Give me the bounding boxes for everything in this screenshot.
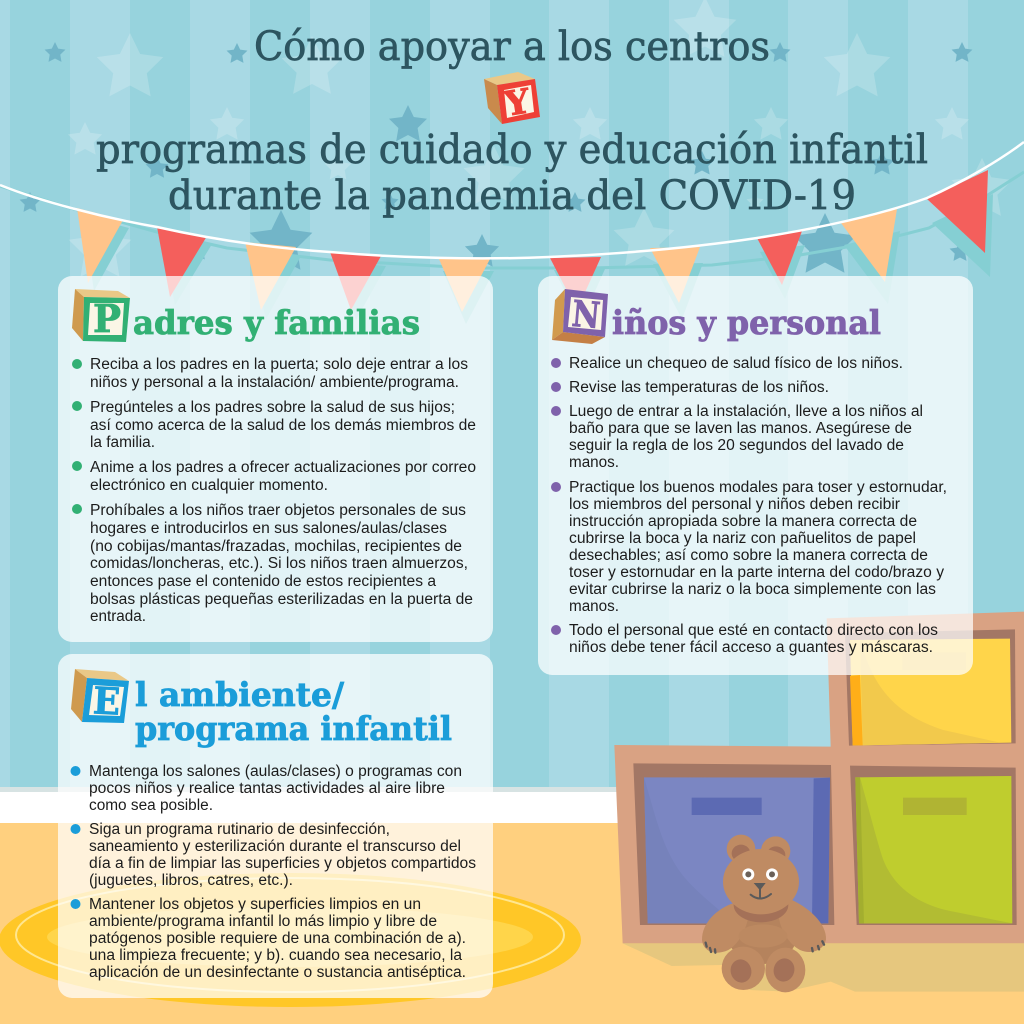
bullet list: environment: pocos niños y realice tantas actividades al aire libre xyxy=(89,780,445,797)
bullet list: children and staff: manos. xyxy=(569,454,619,471)
bullet list: children and staff: baño para que se laven las manos. Asegúrese de xyxy=(569,420,912,437)
blue bin xyxy=(644,777,830,923)
title: durante la pandemia del COVID-19 xyxy=(168,173,856,219)
bullet list: parents: (no cobijas/mantas/frazadas, mochilas, recipientes de xyxy=(90,538,462,555)
icon: E alphabet block: E xyxy=(92,678,121,724)
bullet list: environment: Mantener los objetos y superficies limpios en un xyxy=(89,896,421,913)
panel: Padres y familias xyxy=(58,276,493,642)
bullet list: parents: entonces pase el contenido de estos recipientes a xyxy=(90,573,436,590)
icon: N alphabet block: N xyxy=(570,293,602,337)
bullet list: parents: bolsas plásticas pequeñas esterilizadas en la puerta de xyxy=(90,591,473,608)
bullet list: children and staff: seguir la regla de los 20 segundos del lavado de xyxy=(569,437,904,454)
bullet list: children and staff: Todo el personal que esté en contacto directo con los xyxy=(569,622,938,639)
title: Cómo apoyar a los centros xyxy=(254,24,770,70)
bullet list: parents: niños y personal a la instalación/ ambiente/programa. xyxy=(90,374,459,391)
bullet list: environment: Mantenga los salones (aulas/clases) o programas con xyxy=(89,763,462,780)
icon: E alphabet block xyxy=(71,669,129,724)
bunting flags xyxy=(77,170,988,312)
bullet list: children and staff: Practique los buenos modales para toser y estornudar, xyxy=(569,479,947,496)
bullet list: parents xyxy=(72,356,476,625)
bullet list: parents: así como acerca de la salud de los demás miembros de xyxy=(90,417,476,434)
bullet list: parents: Pregúnteles a los padres sobre la salud de sus hijos; xyxy=(90,399,455,416)
bullet list: environment: saneamiento y esterilización durante el transcurso del xyxy=(89,838,461,855)
background: floor and baseboard xyxy=(0,787,1024,1024)
icon: N alphabet block xyxy=(552,289,608,344)
bullet list: environment: Siga un programa rutinario de desinfección, xyxy=(89,821,390,838)
icon: Y alphabet block: Y xyxy=(501,81,533,125)
bullet list: parents: Anime a los padres a ofrecer actualizaciones por correo xyxy=(90,459,476,476)
icon: Y alphabet block xyxy=(484,72,540,125)
bullet list: parents: comidas/loncheras, etc.). Si los niños traen almuerzos, xyxy=(90,555,468,572)
bullet list: children and staff: Realice un chequeo de salud físico de los niños. xyxy=(569,355,903,372)
bullet list: parents: Prohíbales a los niños traer objetos personales de sus xyxy=(90,502,466,519)
bunting string xyxy=(0,142,1024,258)
furniture: cubby shelf xyxy=(614,612,1024,992)
teddy bear xyxy=(702,835,826,992)
bullet list: environment: (juguetes, libros, catres, etc.). xyxy=(89,872,293,889)
floor shadow of shelf xyxy=(623,943,1024,992)
bullet list: children and staff: manos. xyxy=(569,598,619,615)
heading: Padres y familias: adres y familias xyxy=(133,303,420,342)
heading: Niños y personal: iños y personal xyxy=(612,303,881,342)
bullet list: children and staff: desechables; así como sobre la manera correcta de xyxy=(569,547,928,564)
heading: El ambiente / programa infantil: l ambiente/ xyxy=(135,675,345,714)
bullet list: children and staff: toser y estornudar en la parte interna del codo/brazo y xyxy=(569,564,944,581)
bullet list: children and staff xyxy=(551,355,947,656)
bullet list: environment: como sea posible. xyxy=(89,797,213,814)
bullet list: environment: aplicación de un desinfectante o sustancia antiséptica. xyxy=(89,964,466,981)
bullet list: children and staff: instrucción apropiada sobre la manera correcta de xyxy=(569,513,917,530)
title: programas de cuidado y educación infantil xyxy=(96,127,928,173)
bullet list: parents: la familia. xyxy=(90,434,155,451)
bullet list: children and staff: Revise las temperaturas de los niños. xyxy=(569,379,829,396)
rug xyxy=(0,873,581,1007)
bullet list: environment: ambiente/programa infantil lo más limpio y libre de xyxy=(89,913,437,930)
panel: Niños y personal xyxy=(538,276,973,675)
bullet list: children and staff: los miembros del personal y niños deben recibir xyxy=(569,496,900,513)
bullet list: parents: hogares e introducirlos en sus salones/aulas/clases xyxy=(90,520,447,537)
bullet list: parents: electrónico en cualquier momento. xyxy=(90,477,328,494)
bullet list: children and staff: Luego de entrar a la instalación, lleve a los niños al xyxy=(569,403,923,420)
bunting shadow xyxy=(0,172,1024,324)
bullet list: parents: Reciba a los padres en la puerta; solo deje entrar a los xyxy=(90,356,468,373)
bullet list: environment: día a fin de limpiar las superficies y objetos compartidos xyxy=(89,855,476,872)
icon: P alphabet block xyxy=(72,289,130,342)
bullet list: parents: entrada. xyxy=(90,608,146,625)
bullet list: environment: una limpieza frecuente; y b). cuando sea necesario, la xyxy=(89,947,462,964)
bullet list: environment: patógenos posible requiere de una combinación de a). xyxy=(89,930,466,947)
panel: El ambiente / programa infantil xyxy=(58,654,493,998)
heading: El ambiente / programa infantil xyxy=(135,675,452,748)
green bin xyxy=(855,776,1012,923)
bullet list: children and staff: cubrirse la boca y la nariz con pañuelitos de papel xyxy=(569,530,916,547)
title xyxy=(96,24,928,219)
bullet list: children and staff: evitar cubrirse la nariz o la boca simplemente con las xyxy=(569,581,936,598)
background: striped wall xyxy=(0,0,1024,790)
bullet list: children and staff: niños debe tener fácil acceso a guantes y máscaras. xyxy=(569,639,933,656)
background: star pattern xyxy=(20,0,1012,277)
yellow bin xyxy=(850,639,1011,745)
bullet list: environment xyxy=(70,763,476,981)
heading: El ambiente / programa infantil: programa infantil xyxy=(135,709,452,748)
icon: P alphabet block: P xyxy=(93,296,121,341)
